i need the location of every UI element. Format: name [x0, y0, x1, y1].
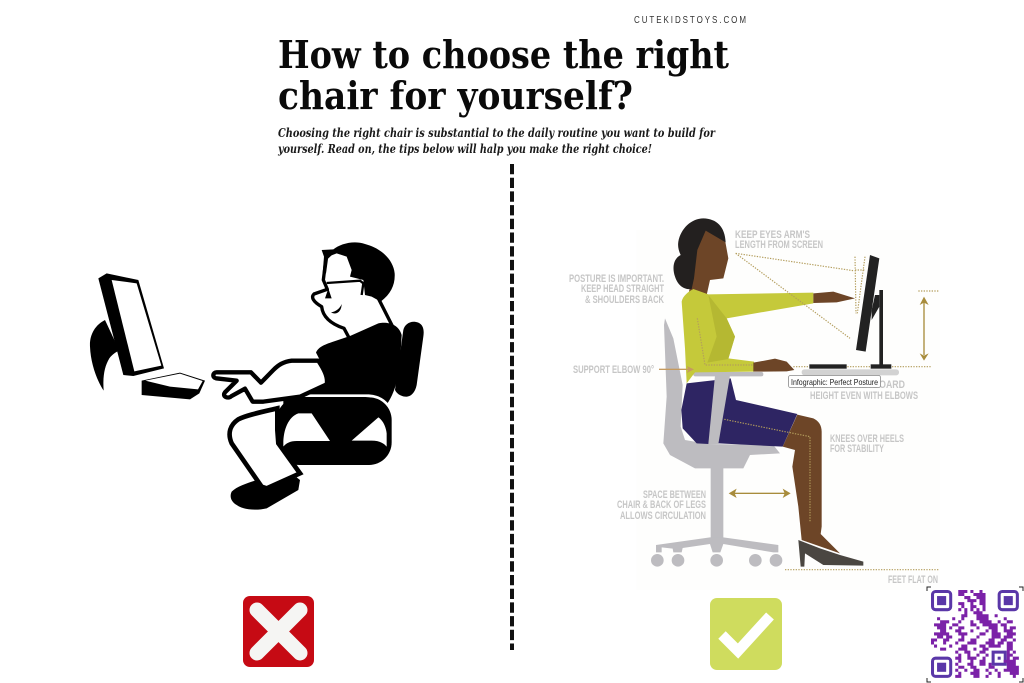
icon: keyboard — [142, 373, 205, 399]
label: knees over heels: FOR STABILITY — [830, 443, 884, 455]
woman leg — [783, 415, 840, 553]
woman hands — [753, 292, 855, 372]
chair post over skirt — [708, 376, 730, 444]
woman head and hair — [673, 218, 728, 295]
monitor and desk — [802, 255, 899, 375]
title: How to choose the right — [278, 32, 729, 77]
label: keep eyes arm's length: LENGTH FROM SCREEN — [735, 239, 823, 251]
label: space between chair and legs — [617, 489, 706, 522]
illustration: bad posture man at computer — [90, 242, 424, 510]
icon: red cross — [243, 596, 314, 667]
chair — [651, 318, 782, 567]
woman shoe — [798, 540, 863, 567]
label: space between chair and legs: SPACE BETWEEN — [643, 489, 706, 501]
site name: CUTEKIDSTOYS.COM — [634, 14, 746, 25]
label: maintain keyboard height — [810, 379, 918, 402]
label: keep eyes arm's length — [735, 229, 823, 251]
man arm and pointing hand — [213, 361, 327, 402]
label: knees over heels — [830, 433, 904, 455]
woman skirt — [681, 378, 797, 447]
woman yellow top — [682, 289, 813, 383]
subtitle: Choosing the right chair is substantial to the daily routine you want to build for — [278, 125, 716, 140]
label: posture is important: POSTURE IS IMPORTANT. — [569, 273, 664, 285]
QR finder patterns — [933, 592, 1017, 676]
center dashed divider — [510, 164, 514, 650]
title — [278, 32, 729, 118]
label: support elbow: SUPPORT ELBOW 90° — [573, 364, 654, 376]
arrow: monitor height — [920, 297, 929, 361]
label: space between chair and legs: ALLOWS CIRCULATION — [620, 510, 706, 522]
label: space between chair and legs: CHAIR & BACK OF LEGS — [617, 499, 706, 511]
arrow: support elbow — [659, 366, 694, 373]
illustration: perfect posture woman at desk — [637, 218, 940, 590]
icon: computer monitor — [90, 273, 164, 391]
icon: green check — [710, 598, 782, 670]
man leg and shoe — [230, 408, 300, 510]
man torso — [283, 323, 402, 443]
label: feet flat on: FEET FLAT ON — [888, 574, 938, 586]
subtitle — [277, 125, 716, 156]
posture guide lines — [697, 253, 938, 570]
QR code — [931, 592, 1019, 676]
label: posture is important — [569, 273, 664, 306]
label: posture is important: KEEP HEAD STRAIGHT — [581, 283, 664, 295]
label: knees over heels: KNEES OVER HEELS — [830, 433, 904, 445]
chair backrest — [395, 322, 424, 397]
arrow: space between chair and legs — [729, 489, 791, 498]
label: keep eyes arm's length: KEEP EYES ARM'S — [735, 229, 810, 241]
label: posture is important: & SHOULDERS BACK — [585, 294, 664, 306]
label: maintain keyboard height: MAINTAIN KEYBOARD — [810, 379, 905, 391]
label: maintain keyboard height: HEIGHT EVEN WITH ELBOWS — [810, 390, 918, 402]
QR corner marks — [927, 587, 1023, 682]
seat and hips — [277, 394, 392, 465]
man head — [313, 242, 395, 338]
QR data modules — [931, 592, 1019, 676]
image background — [637, 230, 940, 590]
tooltip: Infographic: Perfect Posture: Infographic: Perfect Posture — [791, 377, 878, 387]
title: chair for yourself? — [278, 73, 633, 118]
subtitle: yourself. Read on, the tips below will halp you make the right choice! — [277, 141, 652, 156]
